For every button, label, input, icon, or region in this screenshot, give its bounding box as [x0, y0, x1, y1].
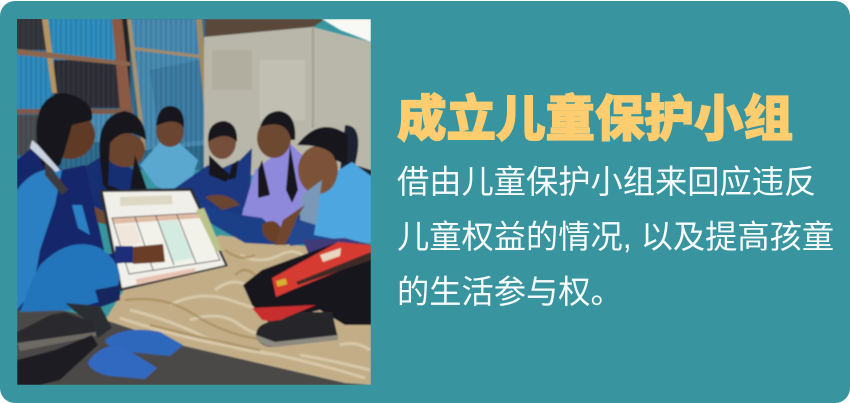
girl 1 blue uniform seated — [17, 93, 165, 312]
red backpack — [243, 242, 371, 325]
heading: 成立儿童保护小组 — [397, 92, 793, 147]
text block: description: 的生活参与权。 — [397, 274, 623, 310]
text block: description: 借由儿童保护小组来回应违反 — [397, 164, 816, 200]
text block: description — [397, 164, 834, 310]
girl 4 and 5 skirts and seated legs — [195, 200, 335, 246]
background wall and sky — [204, 19, 371, 175]
girl center-back blue shirt — [140, 106, 198, 190]
girl 2 navy and blue — [75, 111, 150, 235]
boy light blue — [275, 125, 371, 258]
text block: description: 儿童权益的情况, 以及提高孩童 — [397, 219, 834, 255]
poster with table — [99, 188, 228, 291]
girl 5 purple uniform — [242, 111, 310, 243]
girl 4 navy uniform — [165, 121, 252, 215]
background shed — [10, 10, 210, 170]
photo: children's protection group meeting — [17, 19, 371, 385]
ground — [17, 300, 371, 385]
shoes and sandals — [17, 303, 338, 385]
mat — [105, 235, 371, 385]
